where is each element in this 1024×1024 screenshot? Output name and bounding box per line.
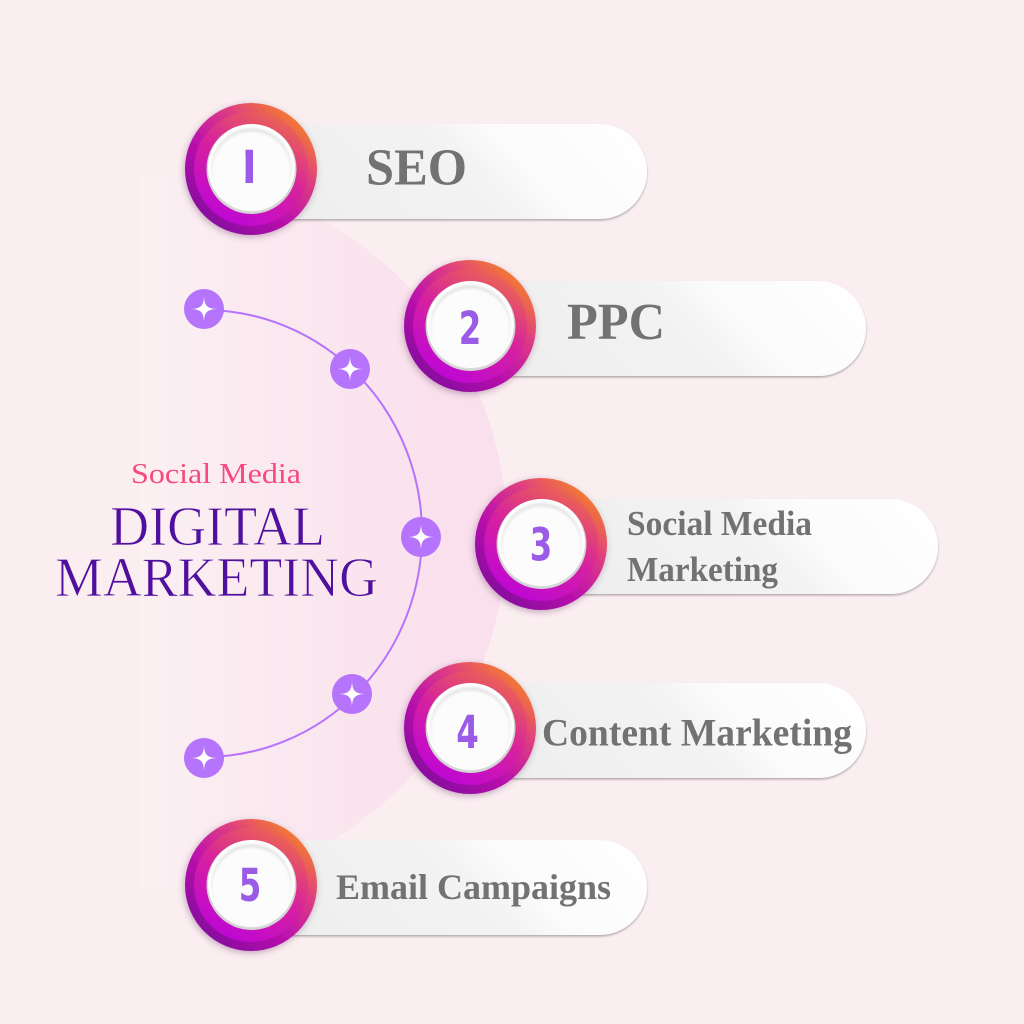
label: Marketing xyxy=(627,550,778,589)
subtitle: Social Media xyxy=(131,458,301,490)
badge xyxy=(185,103,317,235)
item 1: SEO xyxy=(185,103,647,235)
node 3 xyxy=(401,517,441,557)
pill xyxy=(469,281,866,376)
label: Social Media xyxy=(627,504,812,543)
node 4 xyxy=(332,674,372,714)
title line 1: DIGITAL xyxy=(110,496,325,558)
badge: 1 xyxy=(232,142,266,194)
item 2: PPC xyxy=(404,260,866,392)
title xyxy=(55,496,378,609)
item 4: Content Marketing xyxy=(404,662,866,794)
label xyxy=(627,504,812,589)
label: Email Campaigns xyxy=(336,867,611,907)
item 5: Email Campaigns xyxy=(185,819,647,951)
title line 2: MARKETING xyxy=(55,547,378,609)
badge: 3 xyxy=(530,520,552,572)
label: PPC xyxy=(567,294,665,351)
badge: 4 xyxy=(456,708,479,759)
pill xyxy=(469,683,866,778)
label: SEO xyxy=(366,140,467,196)
badge xyxy=(185,819,317,951)
pill xyxy=(541,499,938,594)
node 5 xyxy=(184,738,224,778)
pill xyxy=(250,124,647,219)
badge: 5 xyxy=(239,861,261,912)
badge xyxy=(404,662,536,794)
badge xyxy=(475,478,607,610)
label: Content Marketing xyxy=(542,712,852,754)
arc line xyxy=(204,310,422,757)
pill xyxy=(250,840,647,935)
timeline arc with nodes xyxy=(184,289,441,778)
badge xyxy=(404,260,536,392)
background glow semicircle xyxy=(328,225,504,840)
node 1 xyxy=(184,289,224,329)
item 3: Social Media Marketing xyxy=(475,478,938,610)
node 2 xyxy=(330,349,370,389)
badge: 2 xyxy=(459,304,481,355)
